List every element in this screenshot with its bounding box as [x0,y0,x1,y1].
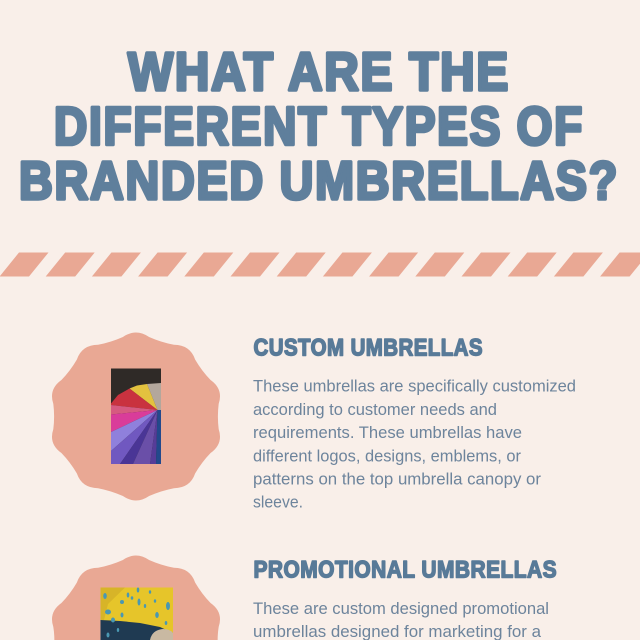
text: custom umbrellas description: according to customer needs and [253,401,497,419]
badge: custom umbrellas [52,332,220,500]
badge: promotional umbrellas [52,556,220,640]
text: custom umbrellas description: different logos, designs, emblems, or [253,448,522,466]
text: custom umbrellas description [253,378,576,512]
text: custom umbrellas description: These umbrellas are specifically customized [253,378,576,396]
text: custom umbrellas description: requirements. These umbrellas have [253,424,522,442]
title: WHAT ARE THE [128,42,510,102]
text: custom umbrellas description: patterns on the top umbrella canopy or [253,470,542,488]
text: promotional umbrellas description [253,600,549,640]
heading: custom umbrellas: CUSTOM UMBRELLAS [254,334,483,362]
text: custom umbrellas description: sleeve. [253,494,303,512]
heading: promotional umbrellas: PROMOTIONAL UMBRELLAS [254,556,557,584]
text: promotional umbrellas description: These are custom designed promotional [253,600,549,618]
striped divider [0,252,640,276]
title [19,42,619,211]
photo: rainbow umbrella [111,368,161,464]
photo: yellow umbrella with raindrops [100,588,173,640]
